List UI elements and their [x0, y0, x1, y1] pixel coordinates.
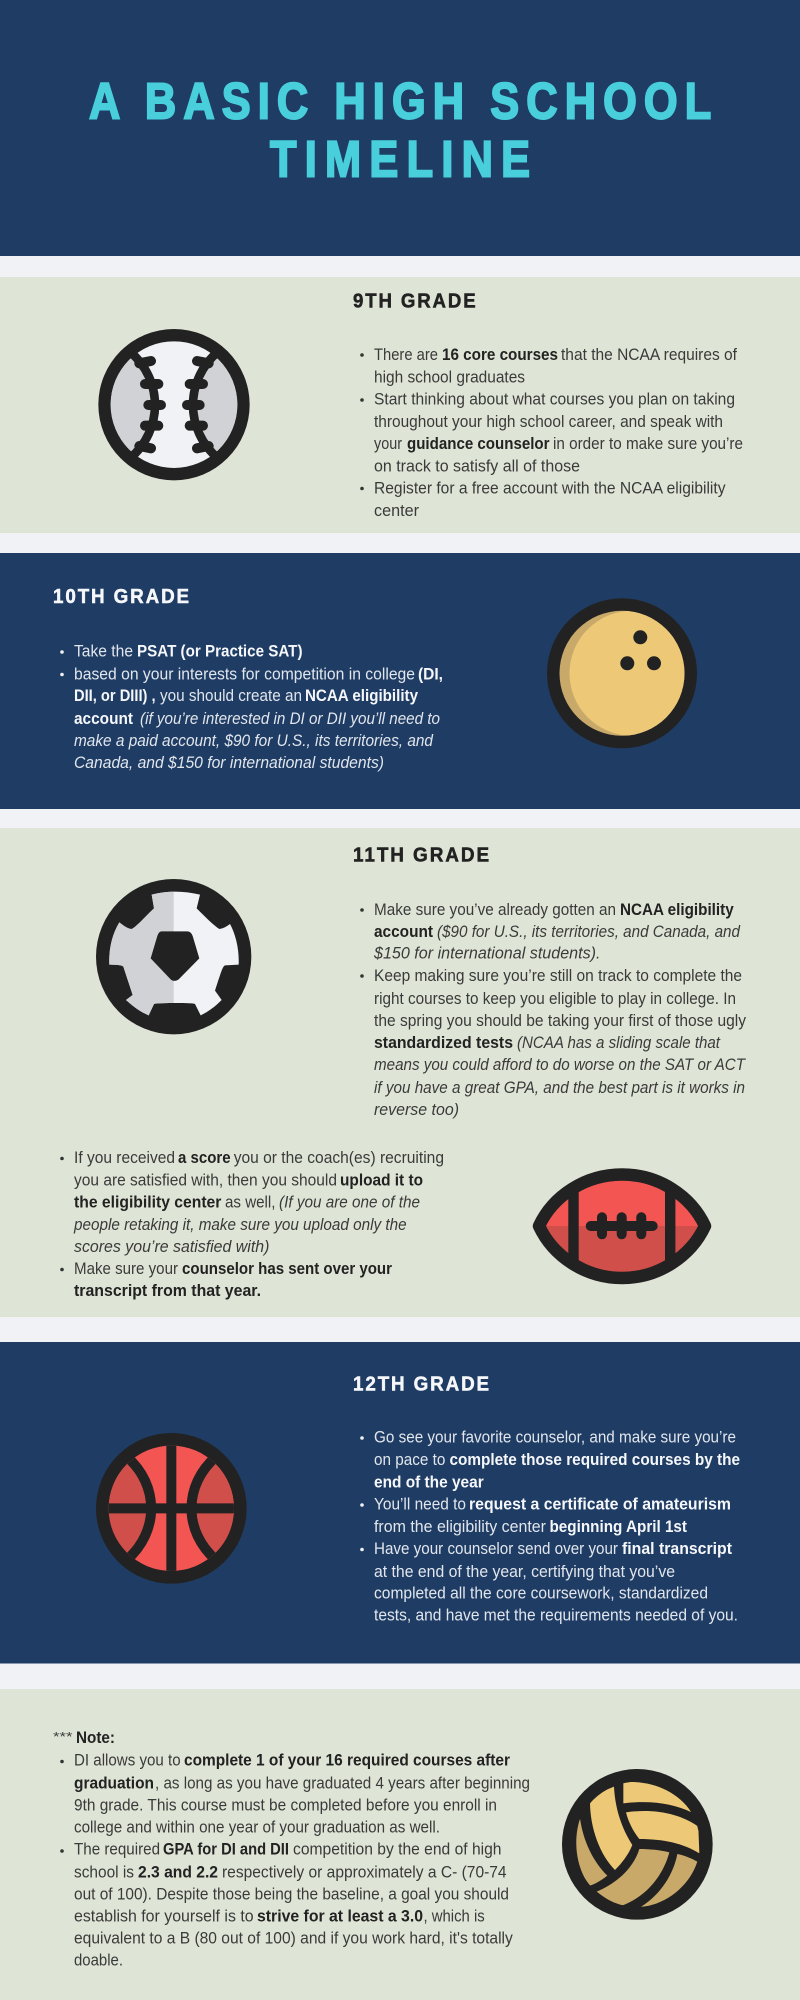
- list: 9th grade tasks: throughout your high school career, and speak with: [374, 412, 723, 431]
- list: 9th grade tasks: [360, 345, 743, 520]
- panel: title header: [0, 0, 800, 256]
- icon: volleyball: [562, 1769, 713, 1920]
- panel: 12th grade: [0, 1342, 800, 1664]
- icon: basketball: [96, 1433, 247, 1584]
- panel: 10th grade: [0, 553, 800, 809]
- list: 9th grade tasks: your: [374, 434, 402, 453]
- heading: 10th grade: 10TH GRADE: [53, 586, 191, 608]
- list: note details: strive for at least a 3.0: [257, 1907, 423, 1926]
- panel: note: [0, 1689, 800, 2000]
- list: note details: GPA for DI and DII: [163, 1840, 289, 1859]
- list: 9th grade tasks: There are: [374, 345, 438, 364]
- list: 10th grade tasks: DII, or DIII) ,: [74, 686, 156, 705]
- list: 11th grade lower tasks: scores you’re satisfied with): [74, 1237, 269, 1256]
- list: 10th grade tasks: (DI,: [418, 664, 443, 683]
- list: note details: doable.: [74, 1951, 123, 1970]
- list: 11th grade lower tasks: transcript from that year.: [74, 1281, 261, 1300]
- list: 11th grade upper tasks: Make sure you’ve already gotten an: [374, 900, 616, 919]
- panel: 9th grade: [0, 277, 800, 533]
- list: 11th grade upper tasks: if you have a great GPA, and the best part is it works in: [374, 1078, 745, 1097]
- list: 12th grade tasks: final transcript: [622, 1539, 732, 1558]
- list: 12th grade tasks: from the eligibility center: [374, 1517, 546, 1536]
- list: 10th grade tasks: based on your interests for competition in college: [74, 664, 415, 683]
- list: 11th grade lower tasks: you or the coach(es) recruiting: [234, 1148, 444, 1167]
- note heading: Note:: [76, 1728, 115, 1747]
- list: note details: [60, 1751, 530, 1970]
- list: 10th grade tasks: NCAA eligibility: [305, 686, 418, 705]
- list: 11th grade lower tasks: the eligibility center: [74, 1192, 222, 1212]
- list: 11th grade lower tasks: If you received: [74, 1148, 175, 1167]
- list: 11th grade upper tasks: means you could afford to do worse on the SAT or ACT: [374, 1055, 746, 1074]
- list: 10th grade tasks: account: [74, 709, 133, 728]
- list: 11th grade upper tasks: $150 for international students).: [373, 944, 600, 963]
- list: 12th grade tasks: at the end of the year, certifying that you’ve: [374, 1562, 675, 1581]
- list: 11th grade lower tasks: as well,: [225, 1192, 276, 1212]
- list: 10th grade tasks: Canada, and $150 for international students): [74, 753, 384, 772]
- list: note details: respectively or approximately a C- (70-74: [222, 1863, 507, 1882]
- list: 11th grade lower tasks: a score: [178, 1148, 231, 1167]
- icon: soccer ball: [96, 879, 251, 1034]
- list: 9th grade tasks: that the NCAA requires of: [561, 345, 737, 364]
- heading: 11th grade: 11TH GRADE: [353, 844, 491, 866]
- list: 11th grade upper tasks: reverse too): [374, 1100, 459, 1119]
- note heading: [53, 1728, 115, 1747]
- list: 12th grade tasks: You’ll need to: [374, 1495, 466, 1514]
- list: 11th grade upper tasks: (NCAA has a sliding scale that: [517, 1033, 721, 1052]
- note heading: ***: [53, 1729, 72, 1744]
- list: 9th grade tasks: Register for a free account with the NCAA eligibility: [374, 478, 726, 498]
- list: note details: graduation: [74, 1774, 154, 1793]
- list: note details: 2.3 and 2.2: [138, 1863, 218, 1882]
- list: 11th grade upper tasks: the spring you should be taking your first of those ugly: [374, 1011, 746, 1030]
- list: note details: school is: [74, 1863, 134, 1882]
- list: 11th grade lower tasks: [60, 1148, 444, 1300]
- list: note details: DI allows you to: [74, 1751, 181, 1770]
- list: 9th grade tasks: Start thinking about what courses you plan on taking: [374, 390, 735, 409]
- list: 9th grade tasks: on track to satisfy all of those: [374, 456, 580, 475]
- list: 11th grade upper tasks: right courses to keep you eligible to play in college. In: [374, 989, 736, 1008]
- list: 12th grade tasks: end of the year: [374, 1472, 484, 1492]
- title: A BASIC HIGH SCHOOL: [89, 73, 711, 130]
- list: 11th grade lower tasks: Make sure your: [74, 1259, 178, 1278]
- list: note details: establish for yourself is to: [74, 1907, 254, 1926]
- list: 12th grade tasks: tests, and have met the requirements needed of you.: [374, 1606, 738, 1625]
- list: 11th grade upper tasks: NCAA eligibility: [620, 900, 734, 919]
- list: note details: The required: [74, 1840, 160, 1859]
- list: 12th grade tasks: Have your counselor send over your: [374, 1539, 618, 1558]
- title: [89, 73, 711, 188]
- list: 9th grade tasks: in order to make sure you’re: [553, 434, 743, 453]
- list: 11th grade lower tasks: (If you are one of the: [279, 1192, 420, 1212]
- list: 11th grade lower tasks: you are satisfied with, then you should: [74, 1170, 337, 1189]
- list: 10th grade tasks: [60, 642, 443, 772]
- list: 12th grade tasks: [360, 1428, 740, 1625]
- heading: 12th grade: 12TH GRADE: [353, 1374, 491, 1396]
- panel: 11th grade: [0, 828, 800, 1317]
- list: 10th grade tasks: (if you’re interested in DI or DII you’ll need to: [140, 709, 440, 728]
- list: 10th grade tasks: make a paid account, $90 for U.S., its territories, and: [74, 731, 433, 750]
- icon: american football: [539, 1174, 705, 1278]
- list: 10th grade tasks: you should create an: [160, 686, 302, 705]
- list: 12th grade tasks: beginning April 1st: [550, 1517, 687, 1536]
- list: 11th grade upper tasks: Keep making sure you’re still on track to complete the: [374, 966, 742, 985]
- icon: baseball: [98, 329, 250, 480]
- list: note details: equivalent to a B (80 out of 100) and if you work hard, it's totally: [74, 1929, 513, 1948]
- icon: bowling ball: [547, 598, 697, 748]
- list: 9th grade tasks: high school graduates: [374, 367, 525, 386]
- list: note details: competition by the end of high: [293, 1840, 502, 1859]
- list: 10th grade tasks: Take the: [74, 642, 133, 661]
- list: 10th grade tasks: PSAT (or Practice SAT): [137, 642, 302, 661]
- list: 12th grade tasks: request a certificate of amateurism: [469, 1495, 731, 1514]
- list: 11th grade lower tasks: counselor has sent over your: [182, 1259, 392, 1278]
- list: 12th grade tasks: Go see your favorite counselor, and make sure you’re: [374, 1428, 736, 1446]
- list: 12th grade tasks: on pace to: [374, 1450, 445, 1469]
- title: TIMELINE: [270, 131, 530, 188]
- list: note details: out of 100). Despite those being the baseline, a goal you should: [74, 1885, 509, 1904]
- list: note details: , as long as you have graduated 4 years after beginning: [155, 1774, 530, 1793]
- list: note details: , which is: [424, 1907, 485, 1926]
- list: 11th grade lower tasks: upload it to: [340, 1170, 423, 1189]
- list: note details: 9th grade. This course must be completed before you enroll in: [74, 1796, 497, 1815]
- list: note details: college and within one year of your graduation as well.: [74, 1818, 440, 1837]
- list: 11th grade upper tasks: standardized tests: [374, 1033, 513, 1052]
- list: 9th grade tasks: center: [374, 501, 419, 520]
- list: 9th grade tasks: 16 core courses: [442, 345, 558, 364]
- list: 11th grade upper tasks: account: [374, 922, 433, 941]
- list: 9th grade tasks: guidance counselor: [407, 434, 550, 453]
- heading: 9th grade: 9TH GRADE: [353, 290, 478, 312]
- list: 11th grade lower tasks: people retaking it, make sure you upload only the: [73, 1215, 407, 1234]
- list: 11th grade upper tasks: ($90 for U.S., its territories, and Canada, and: [437, 922, 740, 941]
- list: 12th grade tasks: complete those required courses by the: [450, 1450, 740, 1469]
- list: 12th grade tasks: completed all the core coursework, standardized: [374, 1584, 708, 1603]
- list: note details: complete 1 of your 16 required courses after: [184, 1751, 510, 1770]
- list: 11th grade upper tasks: [360, 900, 746, 1119]
